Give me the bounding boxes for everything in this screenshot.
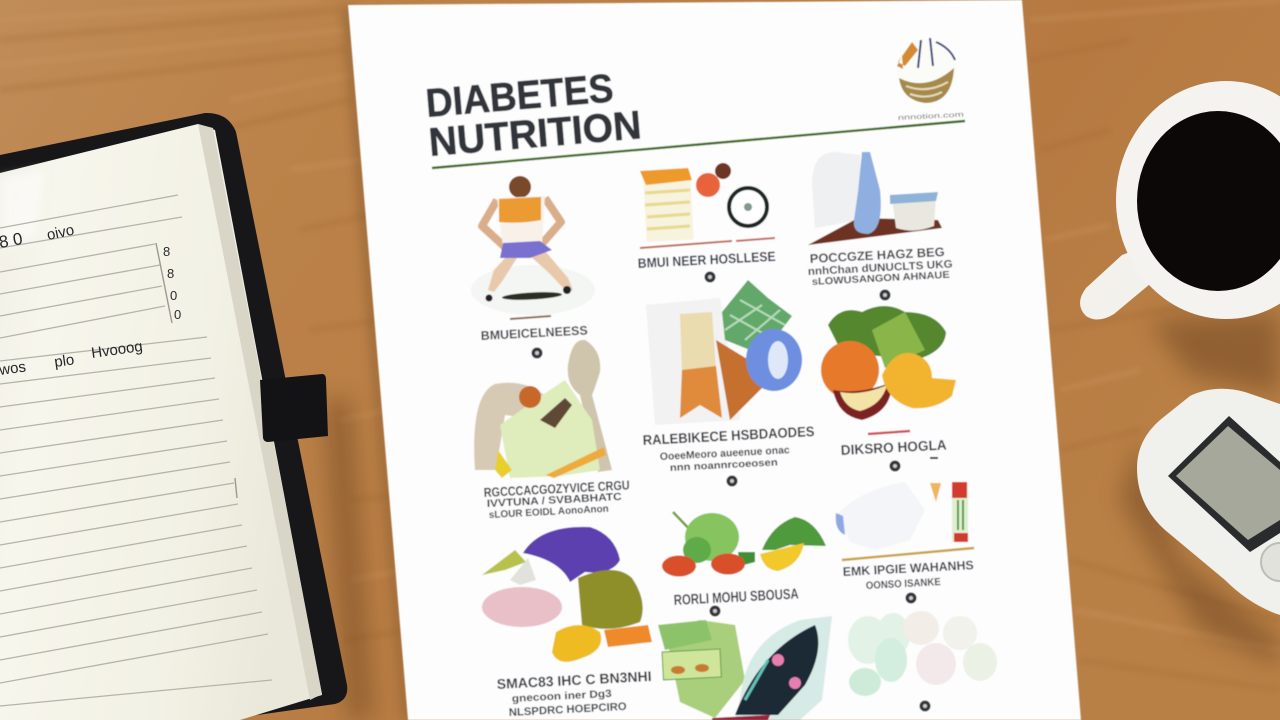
tile: mixed vegetables — [482, 527, 652, 719]
margin column: 0 — [170, 288, 177, 303]
logo caption: nnnotion.com — [898, 112, 964, 122]
paper soft shadow — [342, 2, 410, 720]
light patch on page — [0, 170, 45, 250]
label: nnn noannrcoeosen — [670, 457, 778, 474]
tile: meal package and device — [658, 616, 832, 720]
label — [640, 238, 775, 248]
tile: vegetables row — [662, 512, 826, 616]
infographic sheet — [348, 0, 1081, 720]
cast shadows on desk — [325, 312, 1280, 720]
ribbon tick — [235, 478, 237, 498]
coffee mug — [1080, 81, 1280, 320]
notebook page — [0, 124, 322, 720]
handwritten notes: oivo — [45, 222, 76, 244]
tile: pale shoe sketch: EMK IPGIE WAHANHS — [842, 558, 974, 579]
label: IVVTUNA / SVBABHATC — [487, 491, 622, 510]
label: OoeeMeoro aueenue onac — [660, 444, 790, 463]
label — [842, 548, 974, 560]
label: POCCGZE HAGZ BEG — [809, 245, 945, 266]
mug rim — [1116, 81, 1280, 319]
mug handle — [1080, 250, 1150, 320]
tile: snack stack with wheel — [637, 163, 776, 282]
margin column: 0 — [174, 307, 181, 322]
margin column: 8 — [167, 266, 174, 281]
tile: bottle and bowl — [808, 152, 953, 300]
label — [808, 245, 953, 288]
handwritten notes: Hvooog — [90, 338, 144, 362]
notebook cover — [0, 113, 347, 720]
label — [496, 668, 652, 719]
label: RORLI MOHU SBOUSA — [673, 586, 799, 609]
notebook elastic strap — [260, 374, 328, 442]
label: RGCCCACGOZYVICE CRGU — [483, 477, 630, 500]
label — [642, 423, 815, 474]
margin column — [156, 243, 181, 323]
logo badge — [897, 38, 964, 122]
tile: salad with spoon — [474, 340, 630, 521]
margin column: 8 — [163, 244, 170, 259]
meter button — [1261, 543, 1280, 581]
ruled lines — [0, 195, 272, 706]
label: nnhChan dUNUCLTS UKG — [808, 258, 953, 278]
label — [483, 477, 630, 521]
notebook — [0, 113, 347, 720]
header rule — [432, 121, 965, 168]
label: gnecoon iner Dg3 — [512, 688, 612, 705]
title: NUTRITION — [427, 103, 643, 165]
tile: pale pills — [848, 611, 997, 696]
label: sLOUR EOIDL AonoAnon — [489, 504, 609, 521]
tile: drink carton and cabbage — [642, 280, 815, 486]
title — [424, 66, 643, 165]
label: SMAC83 IHC C BN3NHI — [496, 668, 652, 692]
label — [510, 316, 551, 319]
handwritten notes — [0, 222, 144, 379]
label: sLOWUSANGON AHNAUE — [812, 270, 950, 288]
handwritten notes: plo — [53, 351, 75, 371]
tile: snack stack with wheel: BMUI NEER HOSLLESE — [637, 249, 776, 271]
coffee — [1137, 111, 1280, 291]
label: RALEBIKECE HSBDAODES — [642, 423, 815, 448]
tile: pale shoe sketch — [836, 482, 974, 604]
tile marker — [920, 700, 930, 712]
blood glucose meter — [1137, 389, 1280, 615]
tile: exercise figure: BMUEICELNEESS — [480, 323, 588, 343]
label — [868, 431, 910, 434]
tile: exercise figure — [471, 176, 595, 358]
title: DIABETES — [424, 66, 615, 126]
meter screen — [1168, 416, 1280, 552]
tile: fruit and greens: DIKSRO HOGLA — [840, 436, 947, 458]
tile: fruit and greens — [821, 306, 956, 472]
tile: pale shoe sketch: OONSO ISANKE — [866, 576, 941, 592]
label: NLSPDRC HOEPCIRO — [509, 701, 627, 719]
